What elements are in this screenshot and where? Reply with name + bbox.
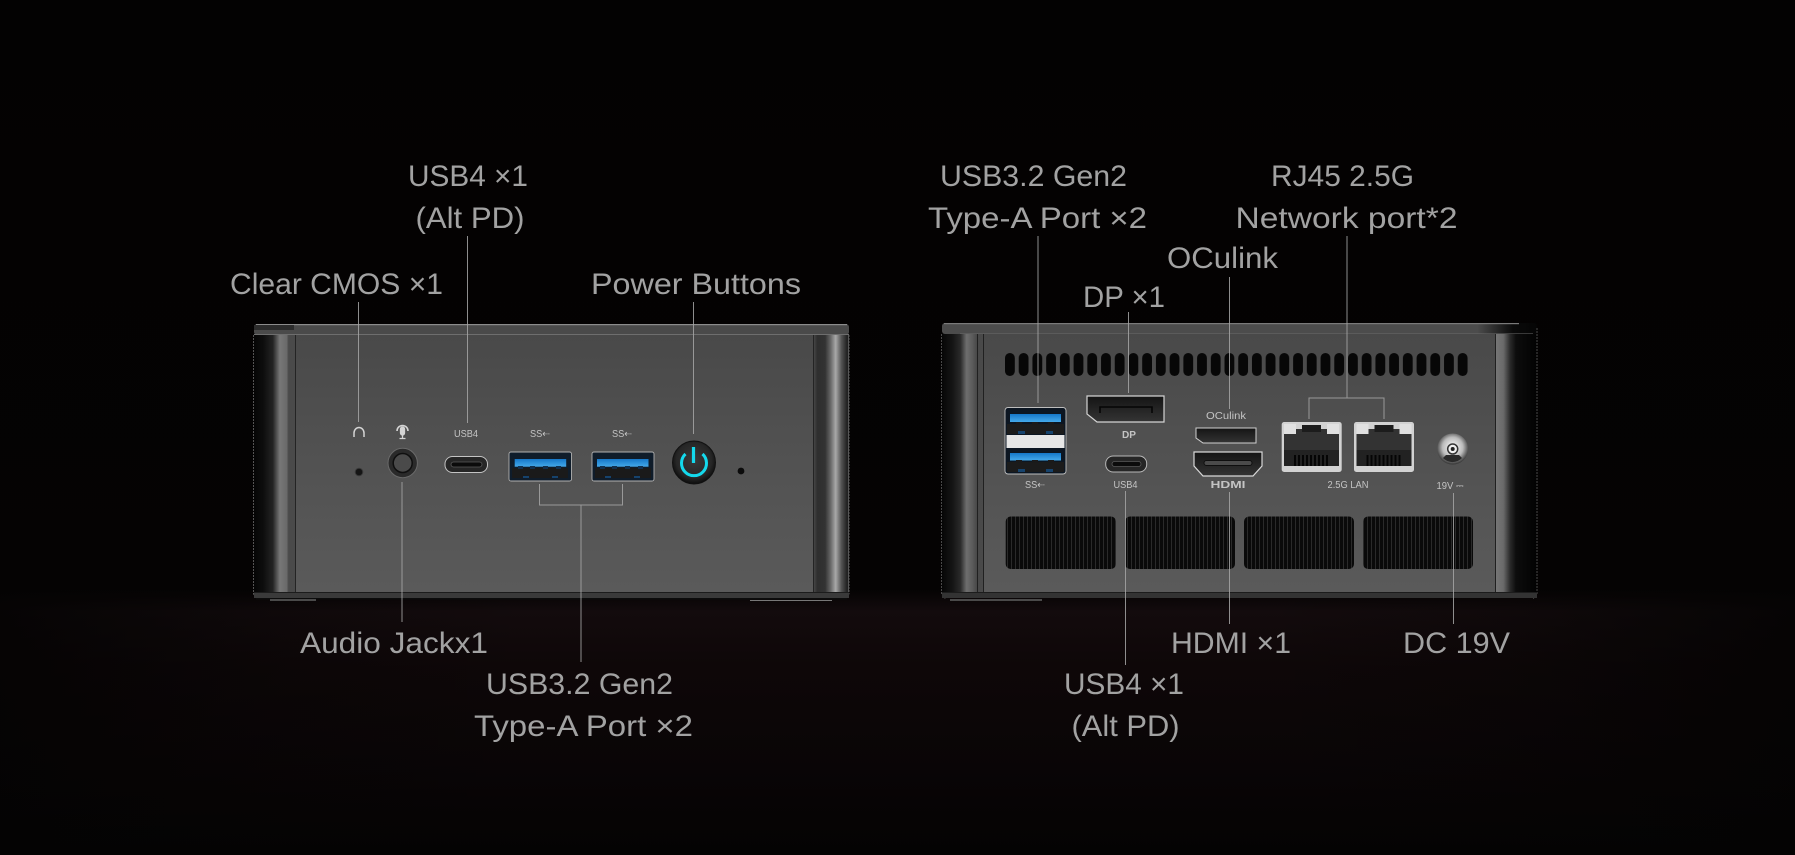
rear chassis base: [942, 592, 1537, 601]
OCulink port: [1196, 428, 1256, 443]
rear right pillar: [1495, 334, 1537, 594]
OCulink caption: OCulink: [1206, 411, 1247, 422]
HDMI caption: HDMI: [1210, 480, 1246, 491]
rear chassis top edge: [942, 323, 1537, 334]
LAN caption: 2.5G LAN: [1328, 480, 1368, 491]
DP port: [1087, 396, 1164, 422]
front chassis base: [254, 592, 849, 601]
front left pillar: [254, 335, 295, 594]
label: OCulink: OCulink: [1167, 242, 1279, 275]
front right pillar: [814, 335, 849, 594]
RJ45 port right: [1354, 422, 1414, 472]
SS logo caption rear: SS⇠: [1025, 480, 1045, 491]
label: USB4 front: USB4 ×1: [408, 160, 528, 193]
rear chassis outline: [942, 328, 1537, 599]
label: USB4 rear: (Alt PD): [1072, 710, 1180, 743]
SS logo caption right: SS⇠: [612, 429, 632, 440]
HDMI port: [1194, 452, 1262, 476]
label: Power Buttons: Power Buttons: [591, 268, 801, 301]
bottom grille 4: [1363, 516, 1473, 569]
front chassis outline: [254, 335, 849, 599]
bottom grille 1: [1006, 516, 1116, 569]
bottom grille 2: [1125, 516, 1235, 569]
label: USB4 rear: [1064, 668, 1184, 743]
USB4 caption: USB4: [454, 429, 478, 440]
power button: [672, 441, 716, 484]
USB-A port left: [509, 452, 572, 481]
label: RJ45: Network port*2: [1236, 202, 1458, 235]
DC power jack: [1437, 434, 1468, 464]
rear face: [983, 334, 1495, 593]
label: DC 19V: DC 19V: [1403, 627, 1510, 660]
bottom grille 3: [1244, 516, 1354, 569]
USB-A port right: [592, 452, 654, 481]
USB-C port rear: [1106, 456, 1147, 472]
icon: headphone glyph: [354, 428, 364, 437]
label: USB3.2 rear: [928, 160, 1147, 235]
reset hole: [738, 468, 744, 474]
label: RJ45: [1236, 160, 1458, 235]
icon: microphone glyph: [397, 426, 408, 438]
label: USB3.2 rear: Type-A Port ×2: [928, 202, 1147, 235]
label: USB3.2 front: Type-A Port ×2: [474, 710, 693, 743]
rear left pillar: [942, 334, 983, 594]
label: USB3.2 front: [474, 668, 693, 743]
rear face seams: [978, 334, 1496, 592]
USB-C port: [445, 456, 488, 472]
label: DP: DP ×1: [1083, 281, 1165, 314]
label: HDMI: HDMI ×1: [1171, 627, 1291, 660]
19V caption: 19V ⎓: [1436, 481, 1464, 492]
RJ45 port left: [1282, 422, 1342, 472]
front face: [295, 335, 814, 593]
label: RJ45: RJ45 2.5G: [1271, 160, 1414, 193]
front face seams: [296, 335, 814, 592]
label: USB3.2 front: USB3.2 Gen2: [486, 668, 673, 701]
label: Audio Jack: Audio Jackx1: [300, 627, 488, 660]
audio jack: [388, 448, 417, 478]
leader lines: [358, 236, 1454, 665]
label: USB4 front: [408, 160, 528, 235]
panel: rear view of mini PC: [942, 323, 1537, 601]
SS logo caption left: SS⇠: [530, 429, 550, 440]
label: USB4 rear: USB4 ×1: [1064, 668, 1184, 701]
USB4 caption rear: USB4: [1114, 480, 1138, 491]
label: USB3.2 rear: USB3.2 Gen2: [940, 160, 1127, 193]
label: Clear CMOS: Clear CMOS ×1: [230, 268, 443, 301]
DP caption: DP: [1122, 430, 1136, 441]
top vent slots: [1005, 353, 1469, 376]
label: USB4 front: (Alt PD): [416, 202, 524, 235]
clear CMOS hole: [355, 468, 363, 476]
front chassis top edge: [254, 324, 849, 335]
panel: front view of mini PC: [254, 324, 849, 601]
USB-A stacked port: [1005, 408, 1066, 474]
